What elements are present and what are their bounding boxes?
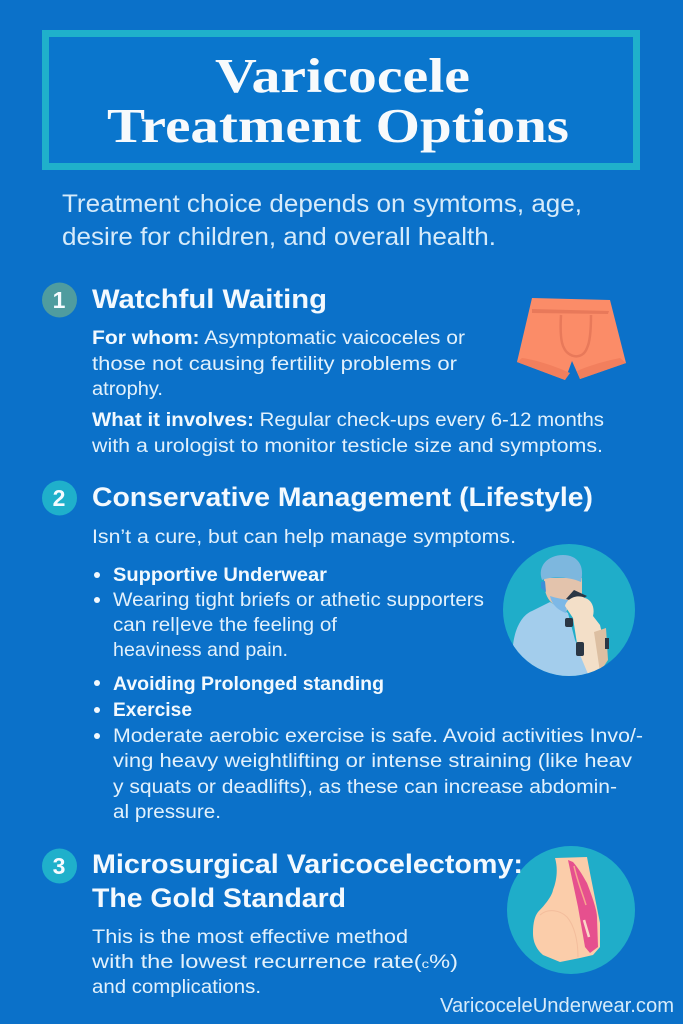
intro text	[62, 190, 582, 251]
description text	[91, 927, 458, 998]
heading 3	[92, 849, 523, 913]
what it involves text: with a urologist to monitor testicle size and symptoms.	[91, 436, 603, 457]
bullet list: Supportive Underwear	[113, 565, 328, 586]
bullet list: Wearing tight briefs or athetic supporters	[113, 590, 484, 611]
number badge 1	[42, 282, 77, 318]
icon: surgeon in circle	[503, 544, 635, 676]
heading 3: The Gold Standard	[92, 883, 346, 913]
title: Treatment Options	[107, 98, 569, 153]
description text: and complications.	[92, 977, 261, 998]
bullet list	[94, 565, 643, 823]
for whom text	[92, 328, 466, 400]
description text: This is the most effective method	[92, 927, 408, 948]
for whom text: those not causing fertility problems or	[92, 354, 458, 375]
what it involves text	[91, 410, 604, 457]
heading 2: Conservative Management (Lifestyle)	[92, 482, 593, 512]
bullet list: y squats or deadlifts), as these can increase abdomin-	[113, 777, 617, 798]
bullet list: heaviness and pain.	[113, 640, 288, 661]
section 2: conservative management	[42, 480, 643, 823]
title	[107, 48, 569, 153]
section 1: watchful waiting	[42, 282, 626, 457]
number badge 2: 2	[53, 485, 65, 511]
icon: orange underwear	[517, 298, 626, 380]
intro text: Treatment choice depends on symtoms, age,	[62, 190, 582, 218]
lead text: Isn’t a cure, but can help manage symptoms.	[92, 527, 516, 548]
section 3: microsurgical varicocelectomy	[42, 846, 635, 998]
number badge 1: 1	[53, 287, 66, 313]
bullet list: al pressure.	[113, 802, 221, 823]
description text: with the lowest recurrence rate( c%)	[91, 952, 458, 973]
for whom text: For whom: Asymptomatic vaicoceles or	[92, 328, 466, 349]
for whom text: atrophy.	[92, 379, 163, 400]
number badge 3: 3	[53, 853, 65, 879]
intro text: desire for children, and overall health.	[62, 223, 496, 251]
footer website: VaricoceleUnderwear.com	[440, 995, 674, 1017]
what it involves text: What it involves: Regular check-ups every 6-12 months	[92, 410, 604, 431]
title: Varicocele	[215, 48, 470, 103]
number badge 2	[42, 480, 77, 516]
bullet list: Moderate aerobic exercise is safe. Avoid activities Invo/-	[113, 726, 643, 747]
icon: anatomy in circle	[507, 846, 635, 974]
title panel	[46, 34, 636, 166]
bullet list: can rel|eve the feeling of	[113, 615, 338, 636]
bullet list: Exercise	[113, 700, 192, 721]
number badge 3	[42, 848, 77, 884]
bullet list: Avoiding Prolonged standing	[113, 674, 384, 695]
heading 3: Microsurgical Varicocelectomy:	[92, 849, 523, 879]
heading 1: Watchful Waiting	[92, 284, 327, 314]
bullet list: ving heavy weightlifting or intense straining (like heav	[113, 751, 633, 772]
